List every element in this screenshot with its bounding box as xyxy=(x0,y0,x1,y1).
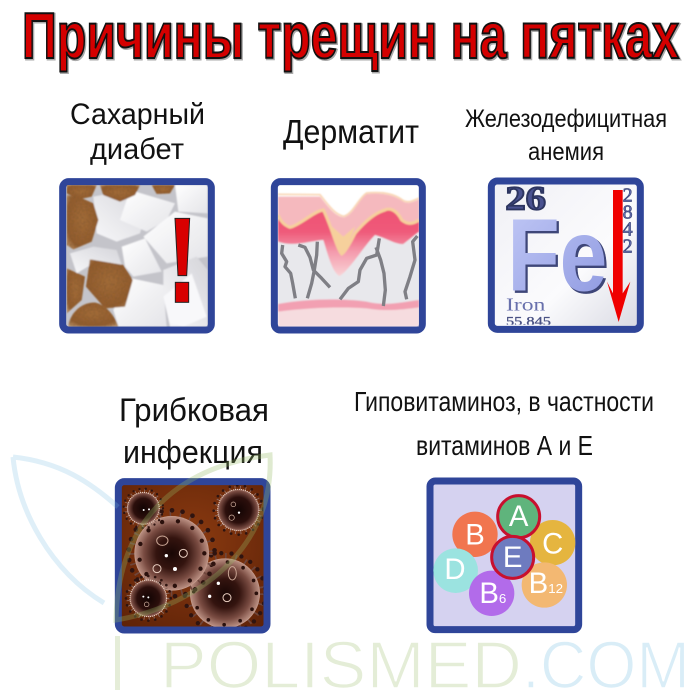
virus: large center xyxy=(129,510,215,596)
panel: sugar xyxy=(63,182,211,330)
symbol Fe: Fe xyxy=(507,197,607,313)
heading: fungal infection: инфекция xyxy=(123,434,263,470)
virus: top right xyxy=(214,485,263,535)
iron number: 26 xyxy=(505,181,546,218)
vitamin E xyxy=(492,536,534,578)
iron label: Iron xyxy=(506,294,545,314)
heading: diabetes: Сахарный xyxy=(70,98,205,131)
cracks xyxy=(282,236,417,306)
electron shells: 2 xyxy=(623,184,633,206)
heading: diabetes: диабет xyxy=(90,133,184,166)
virus: lower right xyxy=(185,553,265,634)
panel: virus xyxy=(118,482,267,634)
electron shells xyxy=(623,184,633,258)
watermark xyxy=(13,455,690,700)
vitamin D xyxy=(433,548,478,593)
heading: hypovitaminosis: витаминов А и Е xyxy=(416,430,593,461)
virus: top left xyxy=(124,489,163,528)
watermark leaf: blue xyxy=(13,457,118,603)
panel: dermatitis xyxy=(274,182,422,330)
heading: hypovitaminosis xyxy=(354,386,654,461)
vitamin B6 xyxy=(469,571,514,616)
vitamin B: B xyxy=(465,519,485,552)
heading: anemia: анемия xyxy=(528,138,604,166)
heading: diabetes xyxy=(70,98,205,166)
vitamin B xyxy=(452,512,498,557)
symbol Fe: Fe xyxy=(509,199,609,315)
electron shells: 8 xyxy=(623,202,633,224)
icon: down arrow xyxy=(607,190,630,322)
watermark bar xyxy=(115,636,120,690)
vitamin B12 xyxy=(522,562,567,608)
heading: dermatitis: Дерматит xyxy=(283,113,419,150)
heading: fungal infection xyxy=(119,392,269,470)
virus: bottom left xyxy=(126,576,171,621)
heading: anemia xyxy=(465,105,667,166)
watermark leaf: green xyxy=(116,455,270,620)
vitamin E: E xyxy=(503,541,522,574)
vitamin C xyxy=(530,520,575,565)
atomic mass: 55.845 xyxy=(506,314,551,328)
heading: anemia: Железодефицитная xyxy=(465,105,667,133)
vitamin A: A xyxy=(509,500,529,533)
vitamin B12: B12 xyxy=(529,567,563,600)
vitamin D: D xyxy=(444,553,466,586)
vitamin B6: B6 xyxy=(479,577,506,610)
icon: exclamation mark xyxy=(175,218,190,302)
symbol Fe xyxy=(513,220,607,294)
panel: iron xyxy=(491,181,640,329)
heading: fungal infection: Грибковая xyxy=(119,392,269,428)
vitamin A xyxy=(498,496,540,538)
panel: vitamins xyxy=(430,481,579,630)
vitamin C: C xyxy=(542,527,563,560)
electron shells: 4 xyxy=(623,219,633,241)
electron shells: 2 xyxy=(623,236,633,258)
